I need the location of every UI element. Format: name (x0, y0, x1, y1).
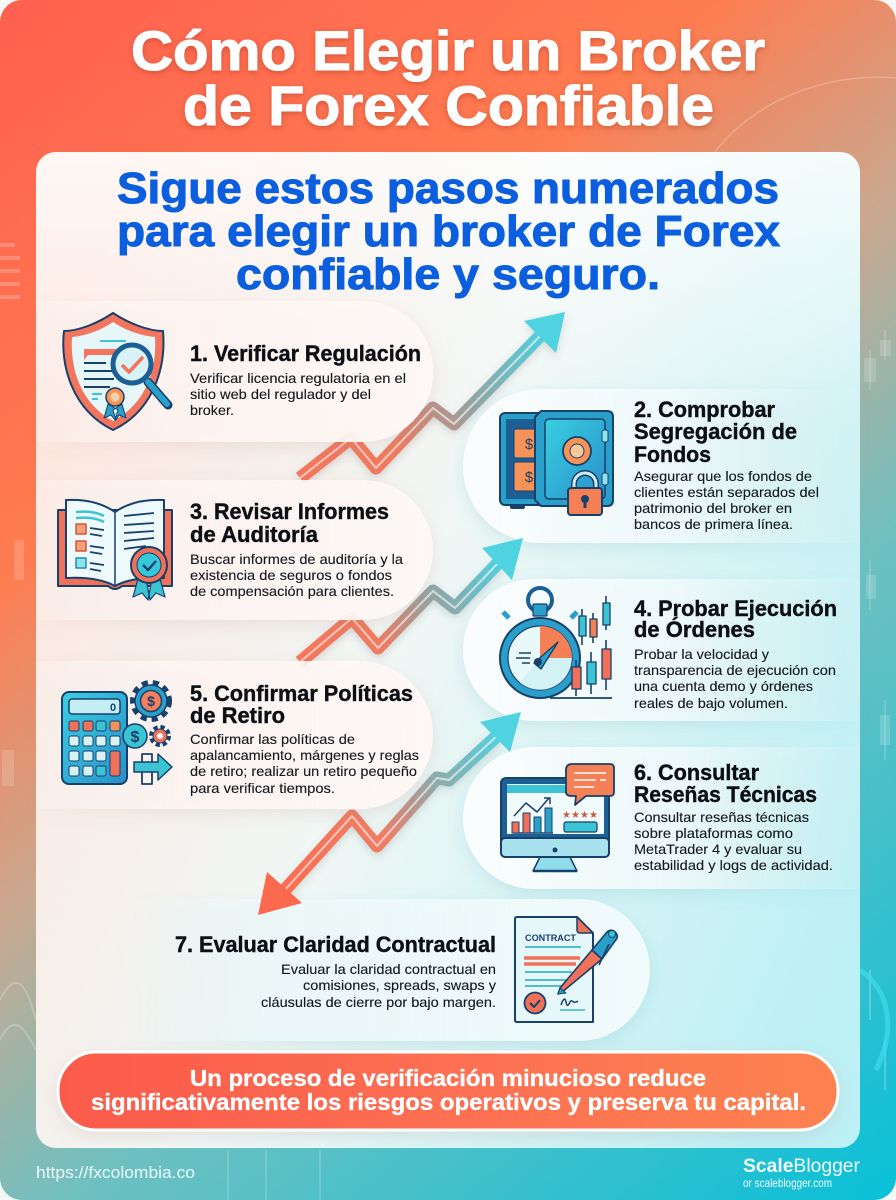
description: estabilidad y logs de actividad. (634, 857, 833, 873)
description: Confirmar las políticas de (190, 731, 355, 747)
heading (634, 760, 817, 807)
arrow: middle zigzag up (300, 561, 500, 662)
description (261, 961, 496, 1010)
card 3: revisar informes de auditoría (36, 480, 433, 620)
description: patrimonio del broker en (634, 500, 792, 516)
card 4: probar ejecución de órdenes (463, 579, 860, 721)
icon: monitor with chart and review bubble (501, 764, 614, 871)
subtitle: confiable y seguro. (236, 250, 660, 299)
icon: open book with seal (58, 500, 172, 600)
description: existencia de seguros o fondos (190, 567, 392, 583)
arrow head: bottom arrow down (258, 872, 302, 915)
heading: de Retiro (190, 703, 285, 728)
heading: 1. Verificar Regulación (190, 341, 421, 366)
card 1: verificar regulación (36, 301, 433, 442)
heading: Reseñas Técnicas (634, 782, 817, 807)
card 6: consultar reseñas técnicas (463, 747, 860, 889)
icon: contract and pen: CONTRACT (525, 933, 576, 944)
heading: 2. Comprobar (634, 397, 775, 422)
description: sitio web del regulador y del (190, 386, 371, 402)
description: Asegurar que los fondos de (634, 468, 812, 484)
icon: contract and pen (515, 917, 617, 1022)
conclusion callout (58, 1052, 838, 1130)
arrow head: middle arrow (482, 538, 523, 580)
arrow: top zigzag up (300, 312, 565, 478)
description: para verificar tiempos. (190, 780, 335, 796)
footer brand: or scaleblogger.com (743, 1176, 832, 1190)
description: MetaTrader 4 y evaluar su (634, 841, 802, 857)
footer brand (743, 1156, 861, 1190)
description: clientes están separados del (634, 484, 819, 500)
description: bancos de primera línea. (634, 516, 793, 532)
description: broker. (190, 402, 234, 418)
description (634, 646, 836, 711)
description: Verificar licencia regulatoria en el (190, 370, 406, 386)
icon: calculator and gears (62, 683, 172, 784)
title (131, 19, 765, 137)
heading (190, 499, 389, 547)
description: Probar la velocidad y (634, 646, 769, 662)
icon: shield with magnifier (63, 313, 168, 430)
description: Buscar informes de auditoría y la (190, 551, 403, 567)
heading: de Auditoría (190, 522, 319, 547)
heading: 5. Confirmar Políticas (190, 681, 413, 706)
icon: safe with padlock: $ (525, 469, 534, 486)
icon: monitor with chart and review bubble: ★★★★ (562, 810, 598, 821)
heading (634, 397, 797, 467)
icon: calculator and gears: 0 (110, 702, 116, 714)
description (634, 468, 819, 532)
description: de compensación para clientes. (190, 583, 394, 599)
subtitle (117, 164, 781, 299)
description (190, 551, 403, 599)
card 7: evaluar claridad contractual (120, 899, 650, 1041)
description (634, 809, 833, 873)
heading: Fondos (634, 442, 711, 467)
main panel (36, 152, 860, 1148)
description: Evaluar la claridad contractual en (281, 961, 496, 977)
heading (190, 681, 413, 728)
icon: safe with padlock (500, 411, 613, 515)
heading: Segregación de (634, 419, 797, 444)
description: cláusulas de cierre por bajo margen. (261, 994, 496, 1010)
heading: 7. Evaluar Claridad Contractual (175, 932, 496, 957)
arrow: double-headed bottom zigzag (283, 735, 498, 892)
description (190, 370, 406, 418)
subtitle: para elegir un broker de Forex (117, 207, 781, 256)
description: Consultar reseñas técnicas (634, 809, 809, 825)
card 5: confirmar políticas de retiro (36, 661, 433, 809)
description: reales de bajo volumen. (634, 695, 788, 711)
heading: 6. Consultar (634, 760, 759, 785)
title: de Forex Confiable (183, 74, 714, 137)
description: transparencia de ejecución con (634, 662, 836, 678)
heading: de Órdenes (634, 617, 755, 642)
subtitle: Sigue estos pasos numerados (117, 164, 779, 213)
description: de retiro; realizar un retiro pequeño (190, 763, 417, 779)
description: comisiones, spreads, swaps y (303, 977, 496, 993)
description: sobre plataformas como (634, 825, 793, 841)
description: apalancamiento, márgenes y reglas (190, 747, 419, 763)
card 2: comprobar segregación de fondos (463, 389, 860, 543)
icon: safe with padlock: $ (525, 436, 534, 453)
title: Cómo Elegir un Broker (131, 19, 765, 82)
icon: stopwatch and candles (500, 588, 612, 698)
heading (634, 596, 837, 642)
arrow head: bottom arrow up (480, 712, 521, 752)
heading: 3. Revisar Informes (190, 499, 389, 524)
footer brand: ScaleBlogger (743, 1156, 861, 1177)
conclusion callout: significativamente los riesgos operativos y preserva tu capital. (91, 1089, 806, 1115)
footer url: https://fxcolombia.co (36, 1164, 195, 1182)
heading: 4. Probar Ejecución (634, 596, 837, 621)
icon: calculator and gears: $ (147, 693, 155, 709)
description (190, 731, 419, 796)
conclusion callout: Un proceso de verificación minucioso reduce (190, 1065, 706, 1091)
icon: calculator and gears: $ (131, 729, 140, 746)
description: una cuenta demo y órdenes (634, 678, 813, 694)
